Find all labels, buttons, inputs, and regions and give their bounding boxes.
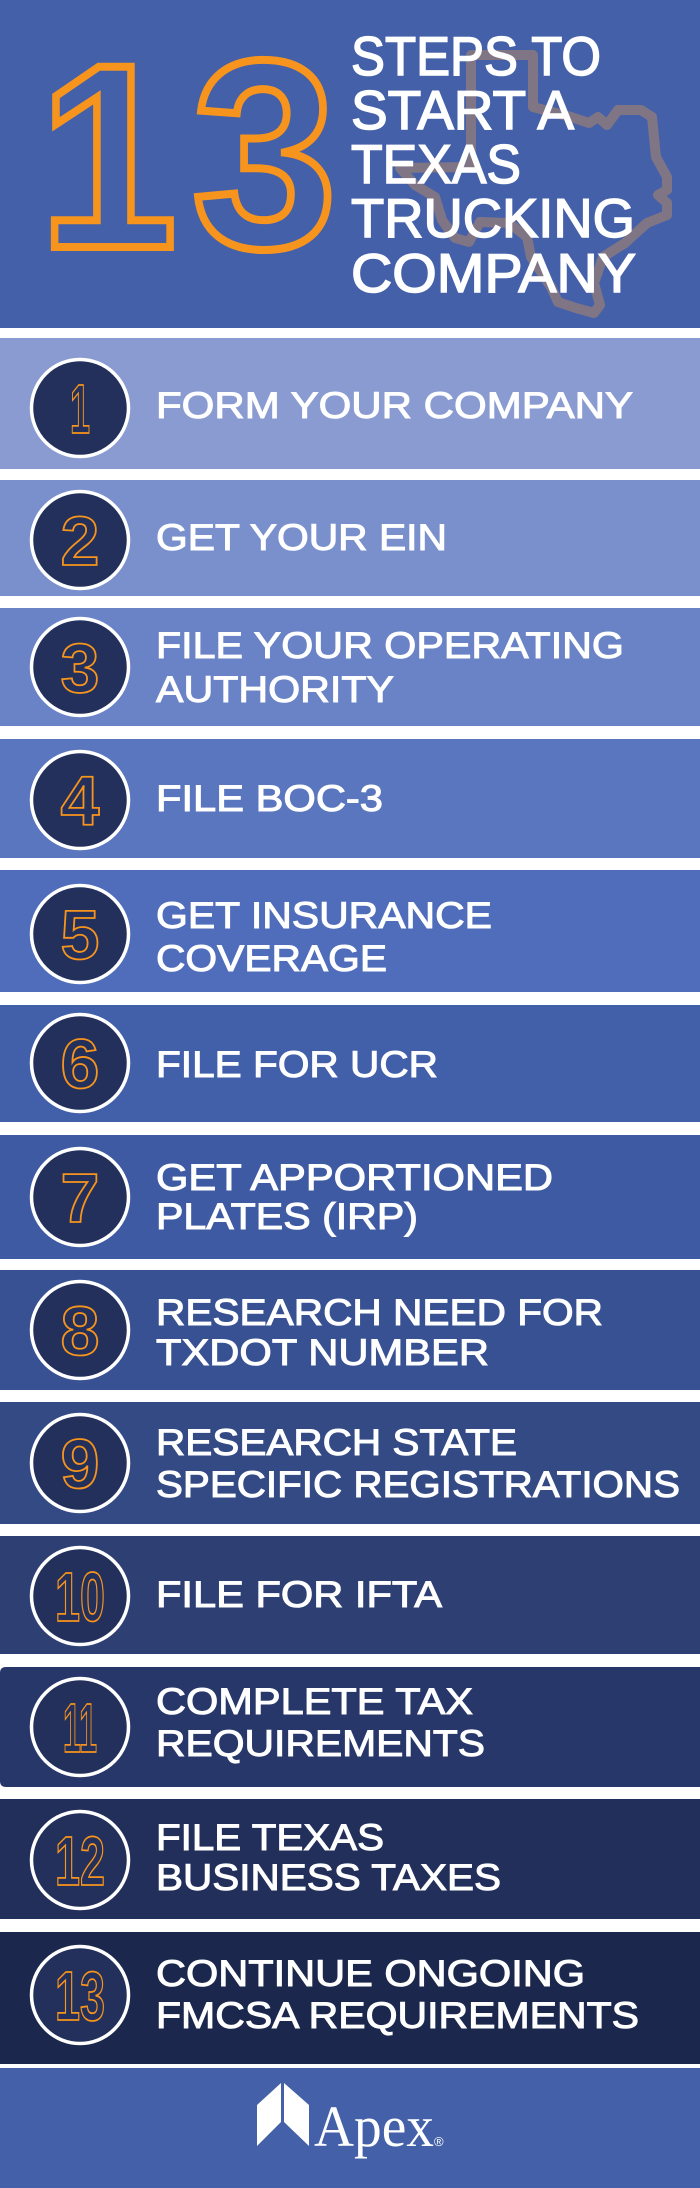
number badge 6 xyxy=(32,1014,128,1112)
step 12 label: BUSINESS TAXES xyxy=(156,1857,501,1898)
step 5 label: COVERAGE xyxy=(156,938,387,979)
step 7 label: GET APPORTIONED xyxy=(156,1157,553,1198)
step 9 label xyxy=(156,1422,680,1505)
panel: header xyxy=(0,0,700,328)
title: STEPS TO xyxy=(351,25,601,87)
number badge 2 xyxy=(32,492,128,588)
number badge 7 xyxy=(32,1148,128,1246)
big number 13: 1 xyxy=(39,10,177,303)
step 4 label: FILE BOC-3 xyxy=(156,778,383,819)
step 8 label: RESEARCH NEED FOR xyxy=(156,1292,603,1333)
step 5 label xyxy=(156,895,492,979)
panel: footer xyxy=(0,2068,700,2188)
step 3 label xyxy=(156,625,624,710)
icon: Texas outline xyxy=(400,55,667,313)
number badge 10: 10 xyxy=(55,1558,105,1636)
step 7 xyxy=(0,1135,700,1259)
number badge 2: 2 xyxy=(60,502,99,580)
step 7 label xyxy=(156,1157,553,1237)
logo wordmark: ® xyxy=(434,2134,444,2149)
number badge 12 xyxy=(32,1812,128,1908)
step 1 xyxy=(0,338,700,469)
step 5 label: GET INSURANCE xyxy=(156,895,492,936)
number badge 13 xyxy=(32,1946,128,2044)
number badge 5 xyxy=(32,886,128,982)
step 2 label: GET YOUR EIN xyxy=(156,517,447,558)
number badge 3 xyxy=(32,618,128,716)
number badge 11 xyxy=(32,1678,128,1776)
step 11 xyxy=(0,1667,700,1787)
step 7 label: PLATES (IRP) xyxy=(156,1196,418,1237)
title: TEXAS xyxy=(351,133,521,195)
step 3 label: AUTHORITY xyxy=(156,669,394,710)
step 8 xyxy=(0,1270,700,1390)
step 9 label: SPECIFIC REGISTRATIONS xyxy=(156,1464,680,1505)
number badge 10 xyxy=(32,1548,128,1644)
number badge 7: 7 xyxy=(60,1159,99,1237)
number badge 9 xyxy=(32,1414,128,1512)
step 13 label: FMCSA REQUIREMENTS xyxy=(156,1995,639,2036)
step 11 label xyxy=(156,1681,485,1764)
number badge 5: 5 xyxy=(60,896,99,974)
title: TRUCKING xyxy=(351,187,635,249)
step 12 label: FILE TEXAS xyxy=(156,1817,384,1858)
number badge 11: 11 xyxy=(63,1689,97,1767)
step 11 label: COMPLETE TAX xyxy=(156,1681,473,1722)
number badge 8 xyxy=(32,1282,128,1378)
step 13 xyxy=(0,1932,700,2064)
number badge 8: 8 xyxy=(60,1292,99,1370)
step 10 label: FILE FOR IFTA xyxy=(156,1574,442,1615)
step 9 label: RESEARCH STATE xyxy=(156,1422,517,1463)
number badge 1: 1 xyxy=(70,370,90,448)
step 1 label: FORM YOUR COMPANY xyxy=(156,385,633,426)
number badge 3: 3 xyxy=(60,629,99,707)
step 3 xyxy=(0,608,700,726)
title: START A xyxy=(351,79,574,141)
number badge 13: 13 xyxy=(55,1957,105,2035)
step 13 label: CONTINUE ONGOING xyxy=(156,1953,585,1994)
step 13 label xyxy=(156,1953,639,2036)
step 2 xyxy=(0,480,700,596)
step 10 xyxy=(0,1536,700,1654)
step 6 xyxy=(0,1005,700,1122)
step 8 label xyxy=(156,1292,603,1373)
title xyxy=(351,25,636,304)
big number 13 xyxy=(39,4,337,304)
step 5 xyxy=(0,870,700,992)
big number 13: 3 xyxy=(192,4,337,304)
step 3 label: FILE YOUR OPERATING xyxy=(156,625,624,666)
step 9 xyxy=(0,1402,700,1524)
step 11 label: REQUIREMENTS xyxy=(156,1723,485,1764)
number badge 4: 4 xyxy=(60,762,100,840)
step 12 label xyxy=(156,1817,501,1898)
number badge 9: 9 xyxy=(60,1425,99,1503)
logo wordmark: Apex xyxy=(314,2094,434,2159)
step 4 xyxy=(0,739,700,858)
step 6 label: FILE FOR UCR xyxy=(156,1044,438,1085)
number badge 12: 12 xyxy=(55,1822,105,1900)
number badge 6: 6 xyxy=(60,1025,99,1103)
step 12 xyxy=(0,1799,700,1919)
number badge 1 xyxy=(32,360,128,456)
step 8 label: TXDOT NUMBER xyxy=(156,1332,489,1373)
icon: Apex logo mark xyxy=(257,2083,309,2146)
title: COMPANY xyxy=(351,242,636,304)
number badge 4 xyxy=(32,752,128,848)
